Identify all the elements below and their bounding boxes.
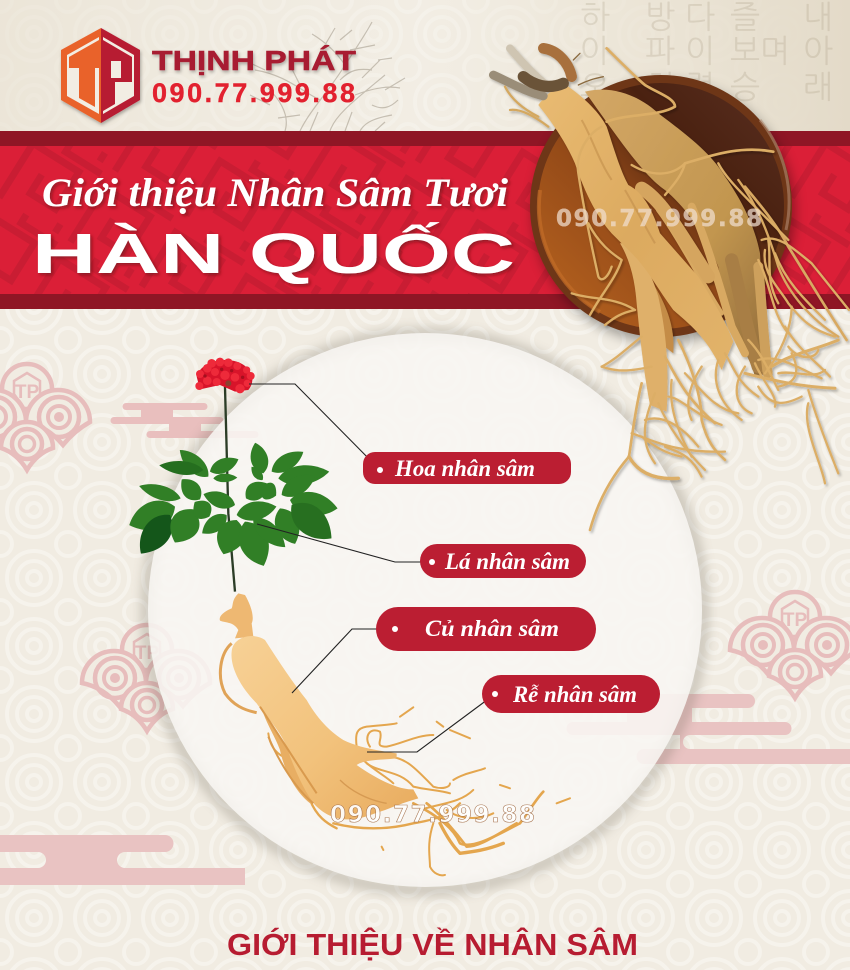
- label: Hoa nhân sâm: [363, 452, 571, 484]
- stem: [225, 387, 235, 592]
- pink cloud bottom left: [0, 835, 245, 885]
- front root leg inner: [655, 287, 674, 353]
- brand name: THỊNH PHÁT: [152, 45, 356, 76]
- label: Hoa nhân sâm: Hoa nhân sâm: [394, 456, 535, 481]
- faint Korean manuscript texture: 아: [580, 35, 610, 67]
- scallop emblem middle left: TP: [135, 643, 159, 664]
- title script line: Giới thiệu Nhân Sâm Tươi: [42, 170, 508, 215]
- scallop emblem left: TP: [15, 382, 39, 403]
- banner: [0, 131, 850, 309]
- neck and head: [220, 593, 253, 638]
- title display line: HÀN QUỐC: [32, 221, 515, 286]
- large white circle panel: [147, 333, 703, 890]
- label: Rễ nhân sâm: Rễ nhân sâm: [512, 682, 637, 707]
- scallop emblem right: TP: [783, 610, 807, 631]
- faint Korean manuscript texture: 파: [645, 35, 675, 67]
- watermark bottom: 090.77.999.88: [330, 802, 535, 828]
- front root third finger: [642, 188, 708, 277]
- wooden plate: [530, 75, 795, 343]
- phone number: 090.77.999.88: [152, 78, 355, 108]
- scallop emblem middle left: [82, 625, 210, 731]
- crown: [493, 48, 603, 127]
- fresh ginseng photo illustration: [493, 48, 849, 530]
- faint Korean manuscript texture: 렬: [685, 71, 715, 103]
- footer heading: GIỚI THIỆU VỀ NHÂN SÂM: [227, 926, 638, 962]
- pink cloud right: [560, 694, 850, 764]
- back root fingers: [658, 180, 847, 353]
- left leg: [263, 713, 317, 803]
- fine orange rootlets: [268, 707, 570, 875]
- banner title: [32, 170, 515, 286]
- faint Korean manuscript texture: 보: [730, 35, 760, 67]
- watermark top: 090.77.999.88: [556, 206, 762, 232]
- label: Lá nhân sâm: [420, 544, 586, 578]
- pink cloud left: [111, 403, 259, 438]
- faint Korean manuscript texture: 며: [760, 35, 790, 67]
- label: Lá nhân sâm: Lá nhân sâm: [444, 549, 570, 574]
- faint Korean manuscript texture: [580, 1, 833, 103]
- faint Korean manuscript texture: 방: [645, 1, 675, 33]
- faint Korean manuscript texture: 다: [685, 1, 715, 33]
- label: Củ nhân sâm: [376, 607, 596, 651]
- front root body: [538, 86, 733, 370]
- faint Korean manuscript texture: 즐: [730, 1, 760, 33]
- faint Korean manuscript texture: 승: [730, 71, 760, 103]
- back root: [585, 90, 768, 377]
- faint Korean manuscript texture: 내: [803, 1, 833, 33]
- faint tree branches behind logo: [248, 22, 405, 131]
- faint Korean manuscript texture: 이: [685, 35, 715, 67]
- leaves: [124, 441, 341, 571]
- lower ginseng root: [220, 593, 570, 875]
- label: Rễ nhân sâm: [482, 675, 660, 713]
- faint Korean manuscript texture: 하: [580, 1, 610, 33]
- scallop emblem right: [730, 592, 850, 698]
- faint Korean manuscript texture: 래: [803, 71, 833, 103]
- logo: [61, 28, 356, 123]
- faint Korean manuscript texture: 오: [580, 71, 610, 103]
- logo hexagon mark: [61, 28, 140, 123]
- ginseng plant: [124, 358, 341, 592]
- scallop emblem left: [0, 364, 90, 470]
- faint Korean manuscript texture: 히: [645, 71, 675, 103]
- callout lines: [249, 384, 495, 752]
- main body: [231, 636, 418, 819]
- red berry cluster: [195, 358, 255, 393]
- label: Củ nhân sâm: Củ nhân sâm: [425, 616, 559, 641]
- thin rootlets: [572, 48, 849, 530]
- faint Korean manuscript texture: 아: [803, 35, 833, 67]
